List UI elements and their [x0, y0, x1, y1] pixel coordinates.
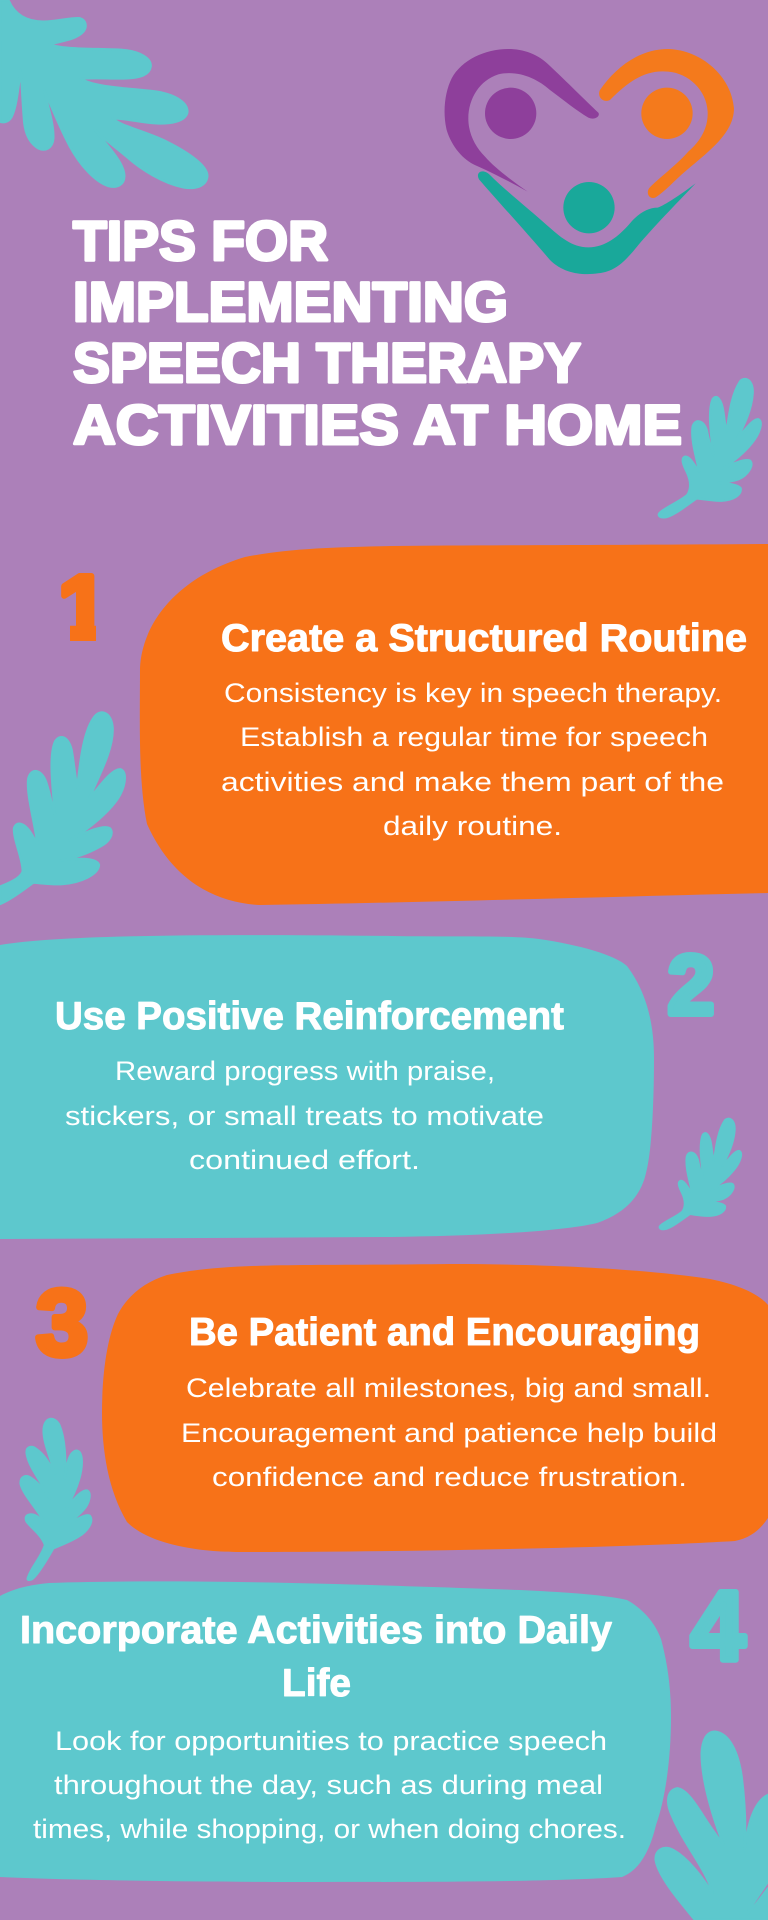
body text 4	[33, 1726, 626, 1844]
icon: leaf left of card 3	[21, 1419, 91, 1580]
orange figure head	[641, 88, 693, 139]
teal figure head	[563, 182, 615, 233]
body text 2: stickers, or small treats to motivate	[65, 1101, 544, 1131]
heading 1: Create a Structured Routine	[221, 617, 747, 660]
heading 4: Incorporate Activities into Daily	[20, 1609, 612, 1652]
number 4: 4	[691, 1571, 745, 1681]
panel: tip 2	[0, 935, 654, 1239]
body text 3: Encouragement and patience help build	[181, 1418, 717, 1448]
orange blob card 3	[102, 1264, 768, 1552]
orange figure arm	[599, 49, 734, 198]
icon: heart logo with three figures	[445, 49, 734, 274]
icon: leaf right of card 2	[660, 1119, 741, 1229]
teal blob card 4	[0, 1581, 671, 1882]
number 2: 2	[668, 938, 714, 1032]
heading 2: Use Positive Reinforcement	[55, 995, 564, 1038]
teal figure arms	[478, 171, 696, 274]
body text 1: activities and make them part of the	[221, 767, 724, 797]
icon: leaf left of card 1	[0, 712, 125, 904]
heading 4	[20, 1609, 612, 1705]
body text 2: Reward progress with praise,	[115, 1056, 495, 1086]
body text 2	[65, 1056, 544, 1175]
title: IMPLEMENTING	[73, 270, 508, 333]
icon: large leaf top left	[0, 0, 207, 188]
body text 3	[181, 1373, 717, 1492]
body text 4: throughout the day, such as during meal	[54, 1770, 603, 1800]
number 3: 3	[36, 1270, 88, 1375]
title: ACTIVITIES AT HOME	[73, 393, 682, 456]
teal blob card 2	[0, 935, 654, 1239]
number 1: 1	[58, 558, 108, 658]
body text 1: Establish a regular time for speech	[240, 722, 708, 752]
panel: tip 1	[140, 544, 768, 905]
title: SPEECH THERAPY	[73, 331, 581, 394]
heading 4: Life	[282, 1662, 351, 1705]
title	[73, 209, 682, 456]
panel: tip 3	[102, 1264, 768, 1552]
body text 2: continued effort.	[189, 1145, 420, 1175]
body text 4: times, while shopping, or when doing chores.	[33, 1814, 626, 1844]
purple figure head	[485, 88, 536, 139]
icon: leaf bottom right	[656, 1732, 768, 1920]
orange blob card 1	[140, 544, 768, 905]
icon: leaf right of title	[659, 379, 761, 517]
body text 3: confidence and reduce frustration.	[212, 1462, 687, 1492]
body text 1: Consistency is key in speech therapy.	[224, 678, 722, 708]
heading 3: Be Patient and Encouraging	[189, 1311, 700, 1354]
purple figure arm	[445, 49, 599, 192]
body text 1	[221, 678, 724, 841]
title: TIPS FOR	[73, 209, 328, 272]
body text 3: Celebrate all milestones, big and small.	[186, 1373, 711, 1403]
panel: tip 4	[0, 1581, 671, 1882]
body text 1: daily routine.	[383, 811, 562, 841]
body text 4: Look for opportunities to practice speech	[55, 1726, 607, 1756]
